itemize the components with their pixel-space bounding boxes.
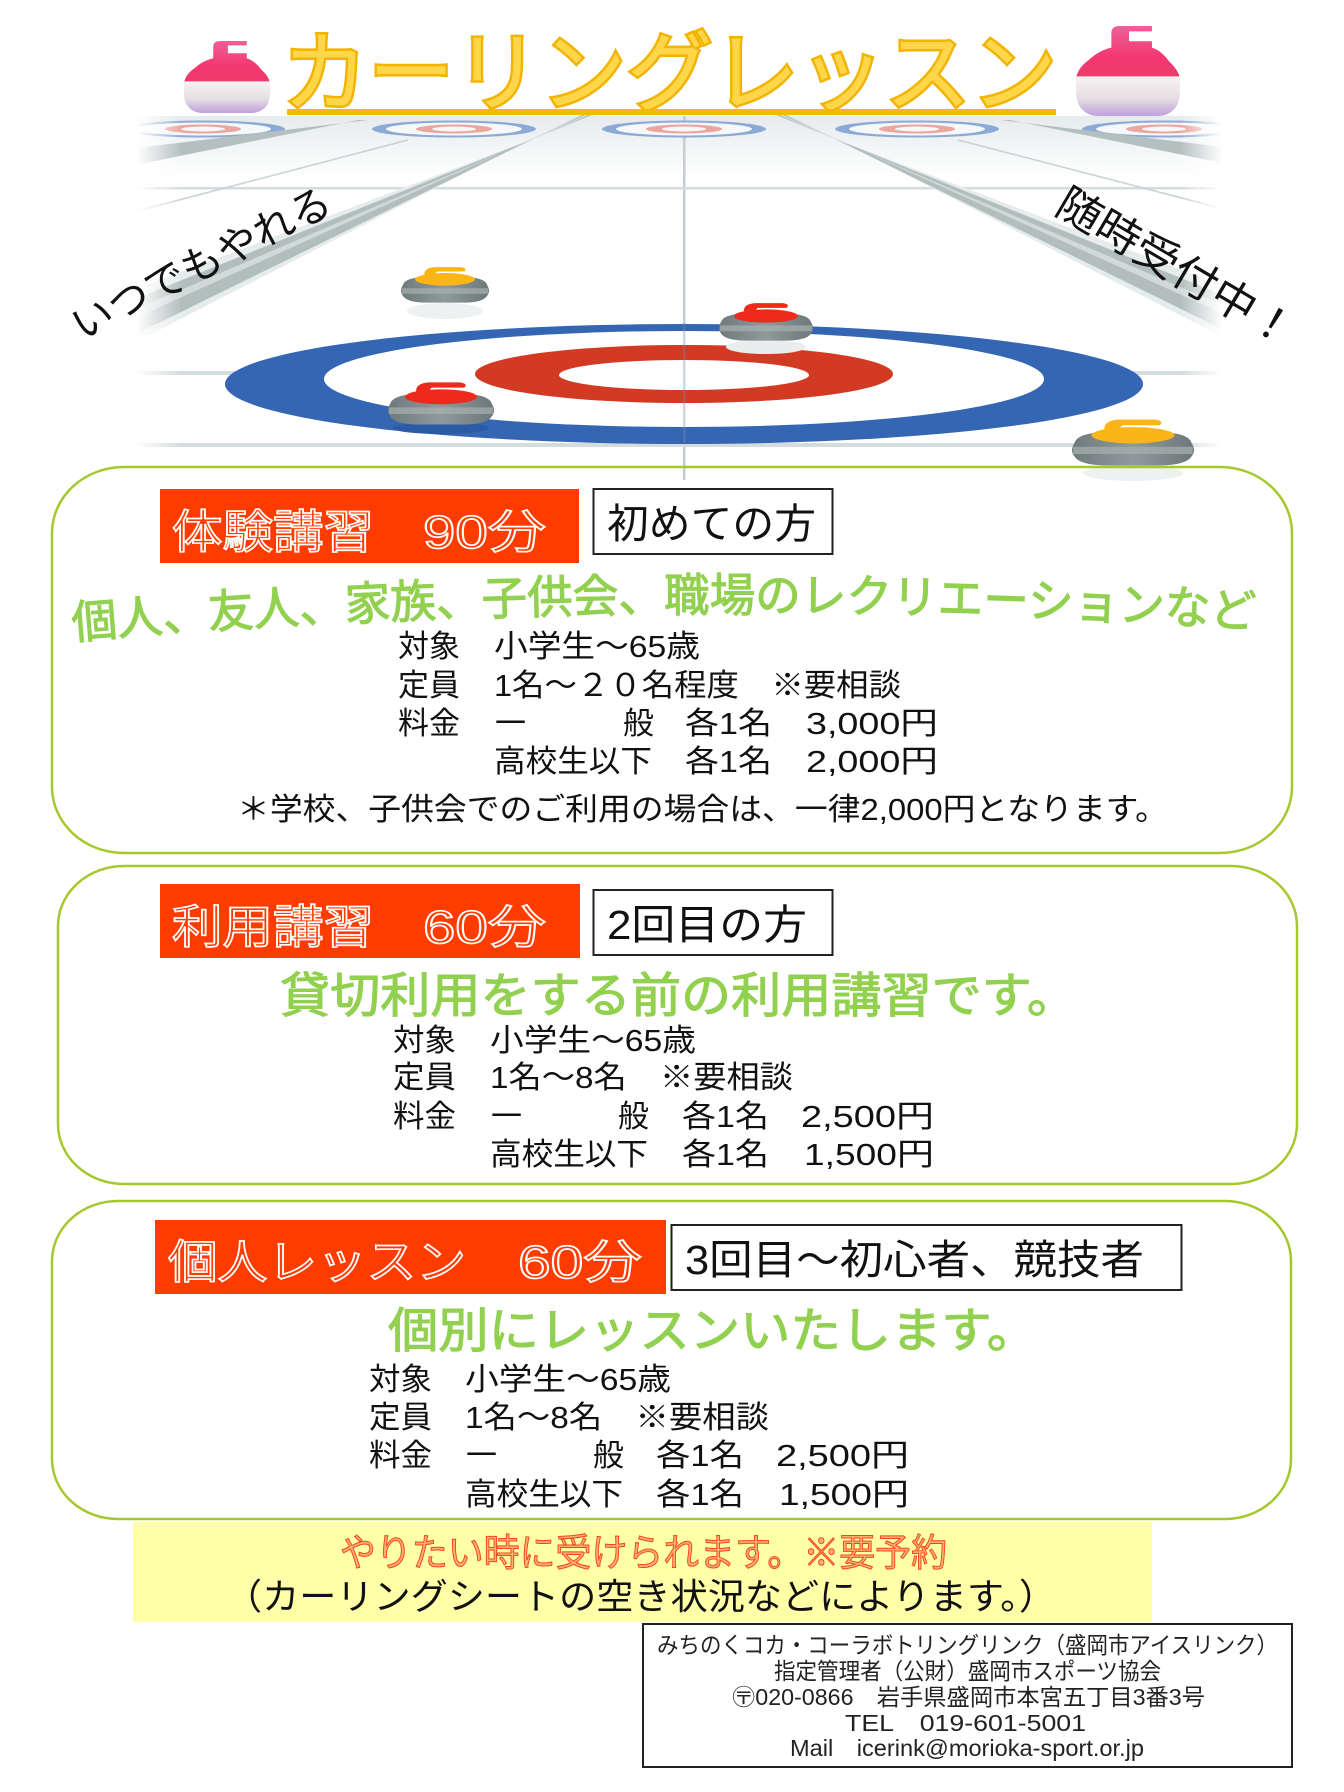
details: 各1名 [685, 706, 772, 741]
heading: 利用講習 60分: 利用講習 [172, 901, 374, 953]
heading: 個人レッスン 60分: 60分 [518, 1236, 642, 1288]
details: 対象 [393, 1023, 456, 1058]
edge fades [100, 112, 1262, 487]
details: 各1名 [685, 744, 772, 779]
main house target [225, 323, 1143, 444]
details: 高校生以下 [494, 744, 652, 779]
contact box: Mail icerink@morioka-sport.or.jp [790, 1735, 1144, 1761]
heading: 個人レッスン 60分 [155, 1220, 666, 1294]
details [369, 1362, 909, 1512]
details: 般 [593, 1438, 624, 1473]
heading: 利用講習 60分: 60分 [423, 901, 546, 953]
details: 対象 [398, 629, 460, 664]
details: 一 [491, 1099, 522, 1134]
details: 料金 [369, 1438, 432, 1473]
details: 一 [495, 706, 526, 741]
callout: reservation note: やりたい時に受けられます。※要予約 [340, 1533, 947, 1575]
details: 般 [623, 706, 654, 741]
subtitle: 個別にレッスンいたします。 [388, 1305, 1037, 1358]
icon: pink curling stone left [184, 41, 270, 113]
details: 1名～8名 ※要相談 [490, 1060, 793, 1095]
panel: 利用講習 [58, 866, 1297, 1184]
callout: reservation note [133, 1522, 1152, 1622]
title: カーリングレッスン [282, 24, 1057, 123]
details: 定員 [393, 1060, 456, 1095]
subtitle arc text: 個人、友人、家族、子供会、職場のレクリエーションなど [72, 572, 1256, 643]
note: ＊学校、子供会でのご利用の場合は、一律2,000円となります。 [237, 792, 1168, 827]
tag: 2回目の方 [594, 890, 832, 955]
subtitle: 貸切利用をする前の利用講習です。 [280, 970, 1077, 1023]
tag: 3回目～初心者、競技者 [672, 1225, 1182, 1290]
panel: 個人レッスン [52, 1201, 1291, 1519]
details [393, 1023, 934, 1172]
details: 1,500円 [804, 1137, 934, 1172]
slogan right: 随時受付中！ [1048, 179, 1303, 357]
callout: reservation note: （カーリングシートの空き状況などによります。） [225, 1576, 1056, 1617]
stone: yellow front [1072, 419, 1194, 481]
centre line [683, 116, 686, 480]
contact box: みちのくコカ・コーラボトリングリンク（盛岡市アイスリンク） [657, 1632, 1278, 1658]
stone: yellow back [401, 267, 489, 319]
contact box: 〶020-0866 岩手県盛岡市本宮五丁目3番3号 [732, 1684, 1205, 1710]
panel: 体験講習 [50, 466, 1294, 854]
details: 2,500円 [776, 1438, 909, 1473]
details: 高校生以下 [465, 1477, 623, 1512]
details: 対象 [369, 1362, 432, 1397]
details: 1,500円 [779, 1477, 909, 1512]
details: 各1名 [656, 1438, 744, 1473]
lane stripes [120, 115, 1248, 350]
heading: 個人レッスン 60分: 個人レッスン [168, 1236, 466, 1288]
contact box [643, 1624, 1292, 1767]
slogan left: いつでもやれる [64, 179, 339, 349]
tag: 3回目～初心者、競技者: 3回目～初心者、競技者 [685, 1237, 1144, 1283]
details: 小学生～65歳 [490, 1023, 696, 1058]
small distant house rings [121, 120, 1246, 138]
stone: red centre [719, 303, 813, 354]
details: 一 [466, 1438, 497, 1473]
details: 各1名 [656, 1477, 744, 1512]
details: 各1名 [682, 1099, 769, 1134]
heading: 体験講習 90分: 90分 [423, 506, 546, 558]
details: 1名～２０名程度 ※要相談 [494, 668, 901, 703]
details: 般 [618, 1099, 649, 1134]
contact box: 指定管理者（公財）盛岡市スポーツ協会 [774, 1658, 1161, 1684]
details: 料金 [393, 1099, 456, 1134]
details: 1名～8名 ※要相談 [465, 1400, 769, 1435]
details: 定員 [398, 668, 460, 703]
details: 小学生～65歳 [494, 629, 700, 664]
details: 2,000円 [806, 744, 938, 779]
details [398, 629, 938, 779]
tag: 2回目の方: 2回目の方 [607, 902, 807, 948]
details: 3,000円 [806, 706, 938, 741]
contact box: TEL 019-601-5001 [845, 1710, 1086, 1736]
details: 小学生～65歳 [465, 1362, 671, 1397]
heading: 利用講習 60分 [160, 884, 580, 958]
details: 定員 [369, 1400, 432, 1435]
heading: 体験講習 90分 [160, 489, 579, 563]
curling rink illustration [100, 112, 1262, 487]
details: 2,500円 [801, 1099, 934, 1134]
details: 各1名 [682, 1137, 769, 1172]
details: 料金 [398, 706, 460, 741]
stone: red front [388, 382, 494, 434]
icon: pink curling stone right [1075, 26, 1181, 116]
tag: 初めての方 [594, 489, 832, 554]
tag: 初めての方: 初めての方 [607, 501, 816, 547]
details: 高校生以下 [490, 1137, 648, 1172]
heading: 体験講習 90分: 体験講習 [172, 506, 374, 558]
